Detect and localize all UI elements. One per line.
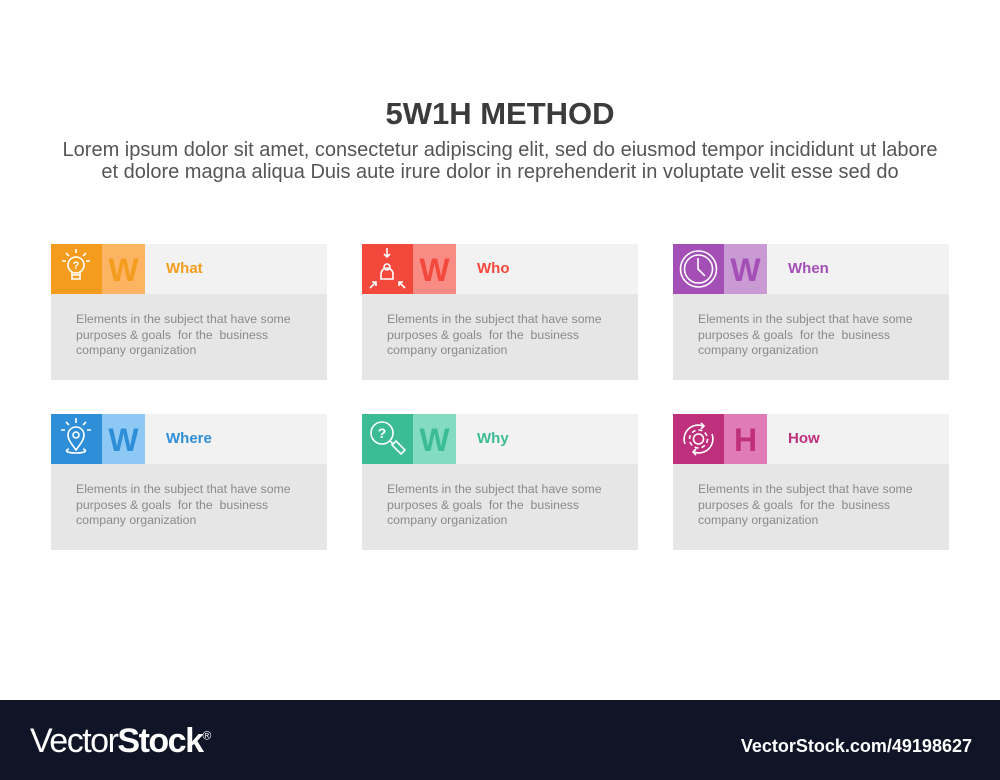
panel: who [362,244,638,380]
letter [413,244,456,294]
subtitle [63,139,937,183]
text: purposes & goals for the business [698,498,890,512]
icon: magnifier [362,414,413,464]
label: What [166,260,203,277]
text [698,482,913,527]
footer bar [0,700,1000,780]
text: company organization [698,513,818,527]
text: Elements in the subject that have some [76,482,291,496]
subtitle: Lorem ipsum dolor sit amet, consectetur adipiscing elit, sed do eiusmod tempor incididunt ut labore [63,139,937,161]
icon: person [362,244,413,294]
text: company organization [76,513,196,527]
label: Who [477,260,509,277]
label: Why [477,430,509,447]
letter: W [419,422,450,458]
text [698,312,913,357]
text [76,312,291,357]
letter: W [108,422,139,458]
letter [102,414,145,464]
text: company organization [387,343,507,357]
panel: how [673,414,949,550]
letter [413,414,456,464]
text: company organization [76,343,196,357]
label: Where [166,430,212,447]
text: Elements in the subject that have some [387,312,602,326]
text: Elements in the subject that have some [387,482,602,496]
icon: lightbulb [51,244,102,294]
text: Elements in the subject that have some [698,482,913,496]
text: purposes & goals for the business [698,328,890,342]
footer logo: VectorStock® [30,722,210,760]
text: Elements in the subject that have some [698,312,913,326]
text: purposes & goals for the business [387,498,579,512]
text: company organization [387,513,507,527]
footer url: VectorStock.com/49198627 [741,736,972,756]
letter: W [419,252,450,288]
text: Elements in the subject that have some [76,312,291,326]
letter: W [730,252,761,288]
text [76,482,291,527]
text [387,312,602,357]
text: purposes & goals for the business [76,498,268,512]
letter [102,244,145,294]
letter [724,244,767,294]
letter: W [108,252,139,288]
label: When [788,260,829,277]
text: purposes & goals for the business [387,328,579,342]
letter: H [734,422,757,458]
text: company organization [698,343,818,357]
text: purposes & goals for the business [76,328,268,342]
icon: gear cycle [673,414,724,464]
panel: where [51,414,327,550]
letter [724,414,767,464]
text [387,482,602,527]
panel: when [673,244,949,380]
title: 5W1H METHOD [385,96,615,131]
subtitle: et dolore magna aliqua Duis aute irure dolor in reprehenderit in voluptate velit esse sed do [101,161,899,183]
icon: clock [673,244,724,294]
panel: why [362,414,638,550]
icon: lightbulb: ? [73,260,80,272]
icon: magnifier: ? [378,425,386,441]
label: How [788,430,820,447]
panel: what [51,244,327,380]
icon: location pin [51,414,102,464]
